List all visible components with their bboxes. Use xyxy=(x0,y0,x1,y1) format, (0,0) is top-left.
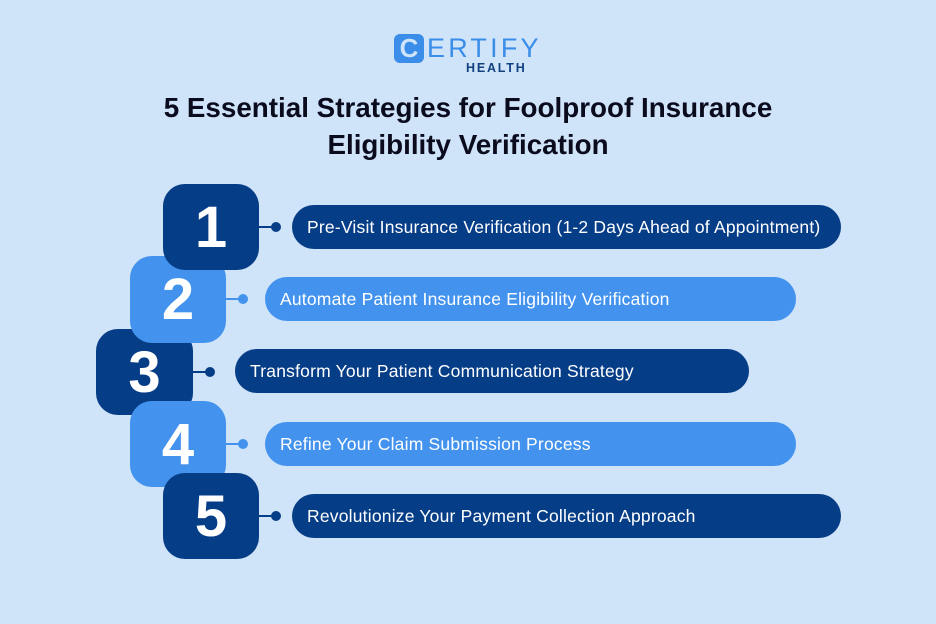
step 3 xyxy=(96,329,749,415)
logo xyxy=(394,33,542,75)
step 2 xyxy=(130,256,796,343)
step 1 xyxy=(163,184,841,270)
step 2: 2 xyxy=(162,267,194,332)
title: Eligibility Verification xyxy=(327,129,609,160)
step 4 xyxy=(130,401,796,487)
step 5: 5 xyxy=(195,484,227,548)
logo: ERTIFY xyxy=(427,33,542,63)
step 1: 1 xyxy=(195,194,227,260)
step 3: Transform Your Patient Communication Strategy xyxy=(250,360,634,380)
step 1: Pre-Visit Insurance Verification (1-2 Days Ahead of Appointment) xyxy=(307,216,820,236)
step 4: Refine Your Claim Submission Process xyxy=(280,434,591,454)
step 5 xyxy=(163,473,841,559)
title: 5 Essential Strategies for Foolproof Insurance xyxy=(164,92,772,123)
step 2: Automate Patient Insurance Eligibility Verification xyxy=(280,288,670,308)
icon: logo C: C xyxy=(400,33,418,63)
step 3: 3 xyxy=(128,340,161,404)
title xyxy=(164,92,772,160)
step 5: Revolutionize Your Payment Collection Approach xyxy=(307,506,696,526)
logo: HEALTH xyxy=(466,61,527,75)
icon: logo C xyxy=(394,34,424,63)
step 4: 4 xyxy=(162,412,194,476)
